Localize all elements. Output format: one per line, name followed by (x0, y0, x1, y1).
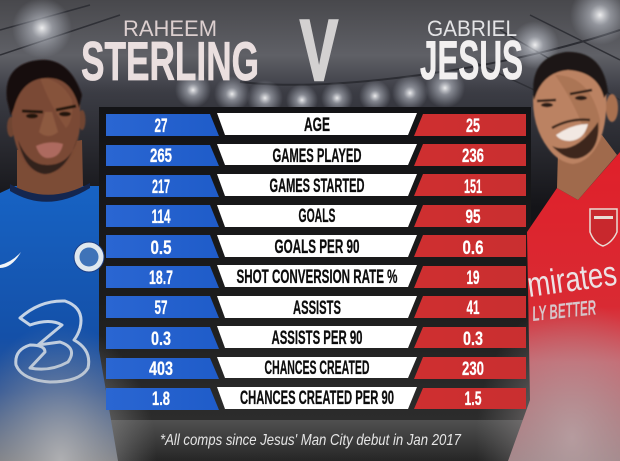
row: games started: 151 (464, 177, 482, 198)
row: chances created: CHANCES CREATED (264, 358, 370, 379)
player: Gabriel Jesus (508, 52, 620, 461)
row: goals: 95 (466, 207, 481, 228)
row: assists per 90 (106, 326, 526, 350)
row: games played: GAMES PLAYED (272, 146, 362, 167)
Nike swoosh (0, 252, 21, 268)
row: chances created per 90: 1.8 (152, 389, 170, 410)
row: chances created (106, 357, 526, 380)
versus V: V (300, 3, 338, 99)
neck (557, 135, 617, 200)
row: assists (106, 296, 526, 319)
row: games started: 217 (152, 177, 170, 198)
row: age: AGE (304, 115, 330, 136)
shirt: Chelsea blue (0, 186, 118, 461)
row: shot conversion rate (106, 265, 526, 289)
heading: Gabriel Jesus (420, 16, 523, 91)
row: games played (106, 144, 526, 167)
row: assists: 57 (154, 298, 168, 319)
heading: Gabriel Jesus: GABRIEL (427, 16, 517, 41)
footnote: *All comps since Jesus' Man City debut in Jan 2017 (160, 432, 462, 449)
row: chances created per 90 (106, 387, 526, 410)
collar (10, 183, 90, 202)
row: shot conversion rate: SHOT CONVERSION RATE % (236, 267, 398, 288)
player: Raheem Sterling (0, 60, 118, 461)
sponsor logo: 3 (16, 301, 89, 382)
row: games started (106, 174, 526, 198)
row: goals: 114 (152, 207, 171, 228)
row: assists per 90: 0.3 (151, 329, 171, 350)
row: chances created: 230 (462, 359, 484, 380)
row: games played: 236 (462, 146, 484, 167)
heading: Gabriel Jesus: JESUS (420, 29, 523, 91)
heading: Raheem Sterling: RAHEEM (123, 16, 217, 41)
row: chances created: 403 (149, 359, 173, 380)
row: assists per 90: ASSISTS PER 90 (272, 328, 362, 349)
stats panel background (99, 107, 531, 461)
shirt: Arsenal red (508, 152, 620, 461)
row: shot conversion rate: 19 (466, 268, 480, 289)
head (7, 60, 85, 174)
Arsenal badge (590, 209, 617, 246)
row: assists per 90: 0.3 (463, 329, 483, 350)
row: chances created per 90: 1.5 (464, 389, 482, 410)
row: assists: 41 (466, 298, 480, 319)
row: games played: 265 (150, 146, 172, 167)
neck (17, 140, 83, 198)
heading: Raheem Sterling (81, 16, 259, 92)
row: goals per 90: 0.6 (462, 238, 484, 259)
row: goals (106, 205, 526, 228)
row: age (106, 113, 526, 137)
row: shot conversion rate: 18.7 (149, 268, 173, 289)
row: goals: GOALS (298, 206, 336, 227)
row: age: 25 (466, 116, 480, 137)
row: age: 27 (154, 116, 168, 137)
row: games started: GAMES STARTED (270, 176, 364, 197)
Chelsea badge (74, 242, 104, 272)
row: assists: ASSISTS (293, 298, 341, 319)
row: goals per 90: 0.5 (150, 238, 172, 259)
row: goals per 90 (106, 235, 526, 259)
row: goals per 90: GOALS PER 90 (274, 237, 360, 258)
row: chances created per 90: CHANCES CREATED PER 90 (240, 388, 394, 409)
heading: Raheem Sterling: STERLING (81, 30, 259, 92)
head (533, 52, 618, 164)
